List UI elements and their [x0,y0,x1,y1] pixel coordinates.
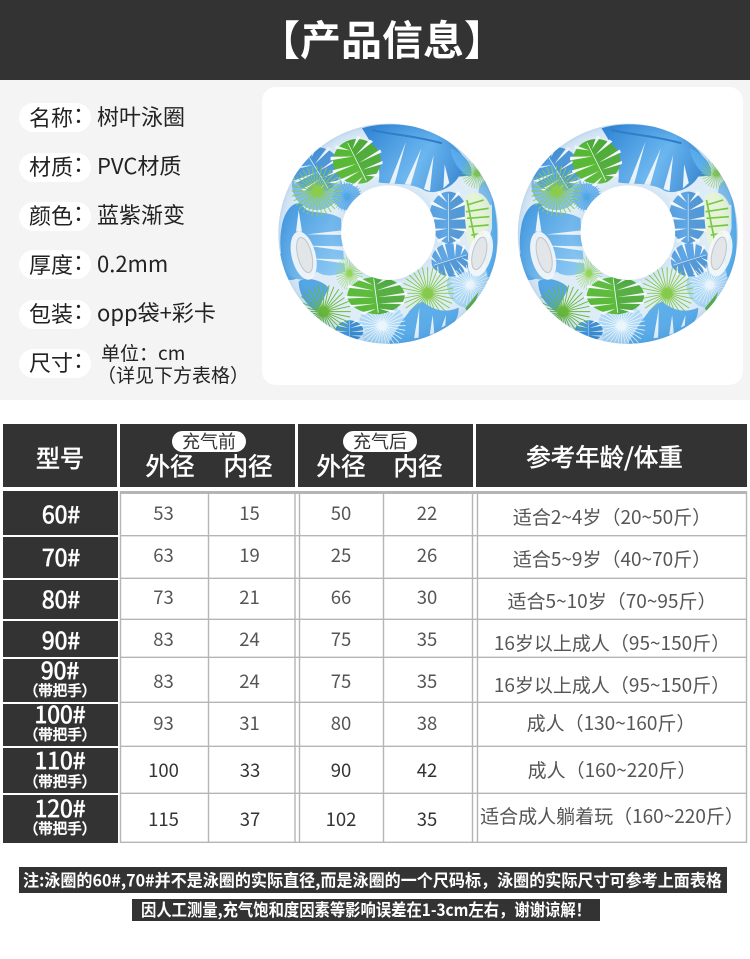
header bar [0,0,750,80]
panel: product image card [262,87,743,385]
model column: （带把手） [24,724,96,745]
note line 1: 注:泳圈的60#,70#并不是泳圈的实际直径,而是泳圈的一个尺码标，泳圈的实际尺寸可参考上面表格 [23,866,722,892]
table header: 内径 [394,448,442,483]
spec list: 0.2mm [97,247,168,279]
product image: swim ring right [515,118,745,349]
table values: 93 [153,710,174,736]
spec list: ： [73,196,95,228]
table values: 75 [331,626,351,652]
spec list: 尺寸 [29,346,73,378]
table values: 24 [239,668,260,694]
reference age and weight column [480,503,744,829]
table values: 100 [148,757,179,783]
table values: 35 [417,626,437,652]
data table grid [120,491,747,843]
table values: 73 [153,584,174,610]
table header: 外径 [146,448,194,483]
table values: 83 [153,668,174,694]
table values: 37 [240,806,260,832]
spec list: 颜色 [29,199,73,231]
model column: （带把手） [24,680,96,701]
table values: 38 [417,710,437,736]
panel: product info [0,80,750,400]
table header: 充气前 [182,428,236,454]
reference age and weight column: 适合2~4岁（20~50斤） [513,503,711,530]
table header: 内径 [224,448,272,483]
title: 【产品信息】 [259,7,505,67]
table values: 33 [240,757,260,783]
table header: 参考年龄/体重 [526,439,683,474]
table values: 35 [417,806,437,832]
product image: swim ring left [275,118,505,349]
table values: 66 [331,584,351,610]
table values: 90 [331,757,351,783]
spec list: （详见下方表格） [97,361,249,388]
spec list: 厚度 [29,248,73,280]
reference age and weight column: 适合5~10岁（70~95斤） [508,587,716,614]
table values: 31 [239,710,260,736]
table values: 22 [417,500,437,526]
model column: 90# [42,622,80,656]
table values: 35 [417,668,437,694]
reference age and weight column: 成人（130~160斤） [527,709,695,736]
spec list: 包装 [29,297,73,329]
reference age and weight column: 16岁以上成人（95~150斤） [494,629,730,656]
model column: 100# [34,696,86,730]
table values: 50 [331,500,351,526]
spec list: 单位：cm [101,339,185,366]
note line 2: 因人工测量,充气饱和度因素等影响误差在1-3cm左右，谢谢谅解！ [141,896,591,921]
table values: 24 [239,626,260,652]
spec list: ： [73,98,95,130]
model column: 90# [41,652,79,686]
model column: 70# [42,539,80,573]
table values: 25 [331,542,351,568]
spec list: ： [73,343,95,375]
table values: 53 [153,500,174,526]
table values: 19 [239,542,260,568]
reference age and weight column: 适合5~9岁（40~70斤） [513,545,711,572]
spec list: 名称 [29,101,73,133]
spec list: 材质 [29,150,73,182]
model column: 120# [34,790,86,824]
model column [3,491,118,843]
table values [148,500,437,832]
spec list: 树叶泳圈 [97,100,185,132]
table values: 83 [153,626,174,652]
table values: 26 [417,542,437,568]
spec list: 蓝紫渐变 [97,198,185,230]
table values: 63 [153,542,174,568]
model column: 60# [42,496,80,530]
spec list: ： [73,245,95,277]
model column: （带把手） [24,818,96,839]
table values: 102 [326,806,356,832]
reference age and weight column: 适合成人躺着玩（160~220斤） [480,802,744,829]
reference age and weight column: 成人（160~220斤） [528,756,696,783]
table values: 80 [331,710,351,736]
model column: （带把手） [24,771,96,792]
table header: 充气后 [353,428,407,454]
spec list: PVC材质 [97,149,181,181]
table values: 21 [239,584,260,610]
reference age and weight column: 16岁以上成人（95~150斤） [494,671,730,698]
spec list: ： [73,147,95,179]
table header: 外径 [316,448,366,483]
spec list: opp袋+彩卡 [97,296,216,328]
model column: 80# [42,581,80,615]
model column: 110# [34,742,86,776]
table header [3,424,747,487]
table values: 75 [331,668,351,694]
table values: 42 [417,757,437,783]
spec list [19,98,249,388]
spec list: ： [73,294,95,326]
table values: 115 [148,806,179,832]
table values: 15 [239,500,260,526]
table header: 型号 [36,439,84,474]
table values: 30 [417,584,437,610]
